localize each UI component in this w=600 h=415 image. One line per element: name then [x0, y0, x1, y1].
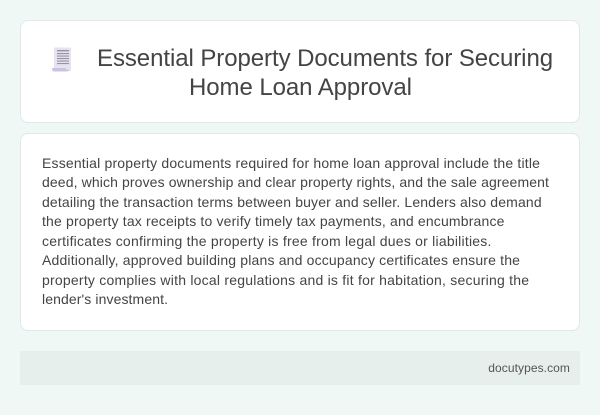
title: Home Loan Approval — [189, 74, 412, 101]
title: Essential Property Documents for Securing — [97, 45, 553, 72]
description text: certificates confirming the property is free from legal dues or liabilities. — [42, 233, 492, 249]
description text — [42, 155, 549, 307]
description text: lender's investment. — [42, 291, 168, 307]
description text: Additionally, approved building plans and occupancy certificates ensure the — [42, 252, 520, 268]
description text: deed, which proves ownership and clear property rights, and the sale agreement — [42, 174, 549, 190]
description text: Essential property documents required for home loan approval include the title — [42, 155, 540, 171]
title — [97, 45, 553, 101]
footer source text: docutypes.com — [488, 361, 570, 375]
panel: title card — [20, 20, 580, 123]
icon: document receipt — [52, 48, 71, 72]
description text: property complies with local regulations and is fit for habitation, securing the — [42, 272, 529, 288]
description text: detailing the transaction terms between buyer and seller. Lenders also demand — [42, 194, 542, 210]
panel: description card — [20, 133, 580, 331]
description text: the property tax receipts to verify timely tax payments, and encumbrance — [42, 213, 505, 229]
footer bar — [20, 351, 580, 385]
